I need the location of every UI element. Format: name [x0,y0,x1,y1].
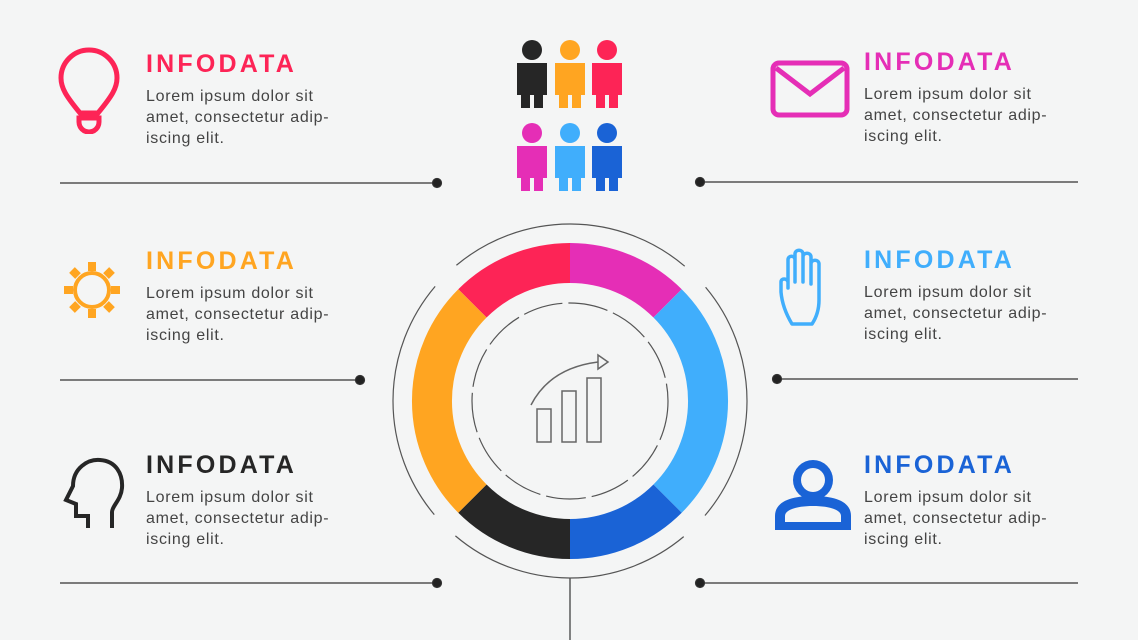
icon: people group [517,40,622,191]
block: left 3: iscing elit. [146,531,225,548]
block: left 1: amet, consectetur adip- [146,109,329,126]
block: left 3: amet, consectetur adip- [146,510,329,527]
block: left 3 [146,451,329,548]
block: right 1: iscing elit. [864,128,943,145]
block: right 3: amet, consectetur adip- [864,510,1047,527]
block: right 1: INFODATA [864,48,1015,76]
block: left 2: INFODATA [146,247,297,275]
block: left 2: Lorem ipsum dolor sit [146,285,314,302]
icon: envelope [770,60,850,118]
block: right 2 [864,246,1047,343]
block: right 2: amet, consectetur adip- [864,305,1047,322]
icon: gear [64,262,120,318]
block: right 2: Lorem ipsum dolor sit [864,284,1032,301]
block: right 3 [864,451,1047,548]
block: right 2: iscing elit. [864,326,943,343]
block: left 2 [146,247,329,344]
block: right 1: amet, consectetur adip- [864,107,1047,124]
block: right 3: iscing elit. [864,531,943,548]
icon: user [775,460,851,530]
block: left 3: Lorem ipsum dolor sit [146,489,314,506]
block: left 3: INFODATA [146,451,297,479]
block: left 1: Lorem ipsum dolor sit [146,88,314,105]
block: left 1: INFODATA [146,50,297,78]
block: left 1 [146,50,329,147]
icon: head [63,458,124,528]
block: left 2: amet, consectetur adip- [146,306,329,323]
block: right 3: Lorem ipsum dolor sit [864,489,1032,506]
block: right 1: Lorem ipsum dolor sit [864,86,1032,103]
block: right 1 [864,48,1047,145]
icon: light bulb [58,48,120,134]
icon: growth chart [531,355,608,442]
block: left 1: iscing elit. [146,130,225,147]
block: left 2: iscing elit. [146,327,225,344]
block: right 3: INFODATA [864,451,1015,479]
block: right 2: INFODATA [864,246,1015,274]
icon: hand [779,248,821,326]
donut ring [432,263,708,539]
